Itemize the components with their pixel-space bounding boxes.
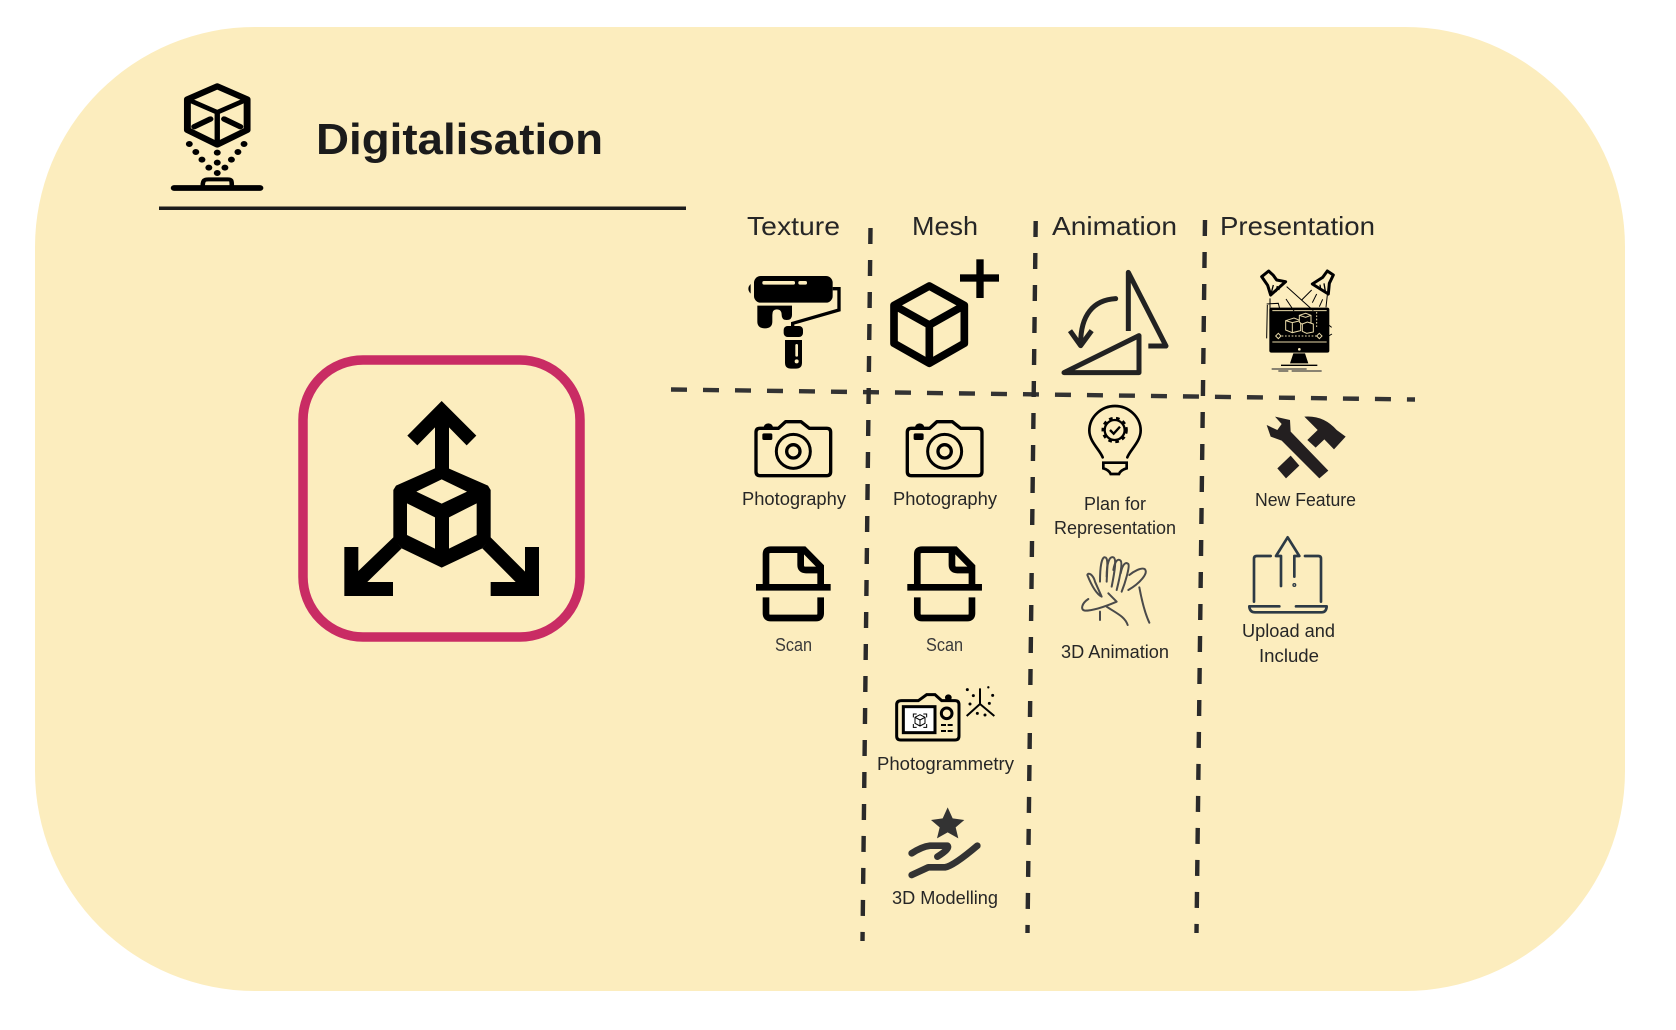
label: Scan (mesh): Scan — [926, 635, 963, 655]
icon: presentation monitor with spotlights — [1262, 271, 1333, 371]
title: Digitalisation — [316, 115, 603, 164]
label: Plan for Representation: Representation — [1054, 518, 1176, 538]
icon: camera (texture) — [756, 422, 831, 476]
column heading: Animation: Animation — [1052, 211, 1177, 241]
title rule — [159, 206, 686, 210]
label: 3D Animation: 3D Animation — [1061, 642, 1169, 662]
icon: cube with plus — [894, 259, 999, 363]
icon: scan (mesh) — [907, 550, 982, 618]
label: 3D Modelling: 3D Modelling — [892, 888, 998, 908]
label: Upload and Include: Include — [1259, 646, 1319, 666]
icon: rotating triangle — [1064, 272, 1166, 373]
label: Upload and Include: Upload and — [1242, 621, 1335, 641]
icon: header cube printer — [174, 86, 260, 188]
icon: framed cube with arrows — [303, 360, 580, 637]
label: Upload and Include — [1242, 621, 1335, 666]
label: Photography (texture): Photography — [742, 489, 846, 509]
icon: wrench and hammer — [1267, 416, 1346, 478]
label: Photography (mesh): Photography — [893, 489, 997, 509]
column heading: Texture: Texture — [747, 211, 840, 241]
label: Scan (texture): Scan — [775, 635, 812, 655]
icon: scan (texture) — [756, 550, 831, 618]
icon: star over hand — [912, 807, 977, 875]
icon: high five hands — [1082, 557, 1149, 625]
icon: paint roller — [748, 276, 839, 369]
label: Plan for Representation: Plan for — [1084, 494, 1146, 514]
icon: upload from laptop — [1249, 537, 1327, 612]
column heading: Mesh: Mesh — [912, 211, 978, 241]
label: Photogrammetry: Photogrammetry — [877, 754, 1014, 774]
icon: camera (mesh) — [907, 422, 982, 476]
column heading: Presentation: Presentation — [1220, 211, 1375, 241]
label: Plan for Representation — [1054, 494, 1176, 538]
icon: photogrammetry camera — [897, 686, 994, 740]
icon: lightbulb with gear — [1089, 406, 1141, 474]
label: New Feature: New Feature — [1255, 490, 1356, 510]
